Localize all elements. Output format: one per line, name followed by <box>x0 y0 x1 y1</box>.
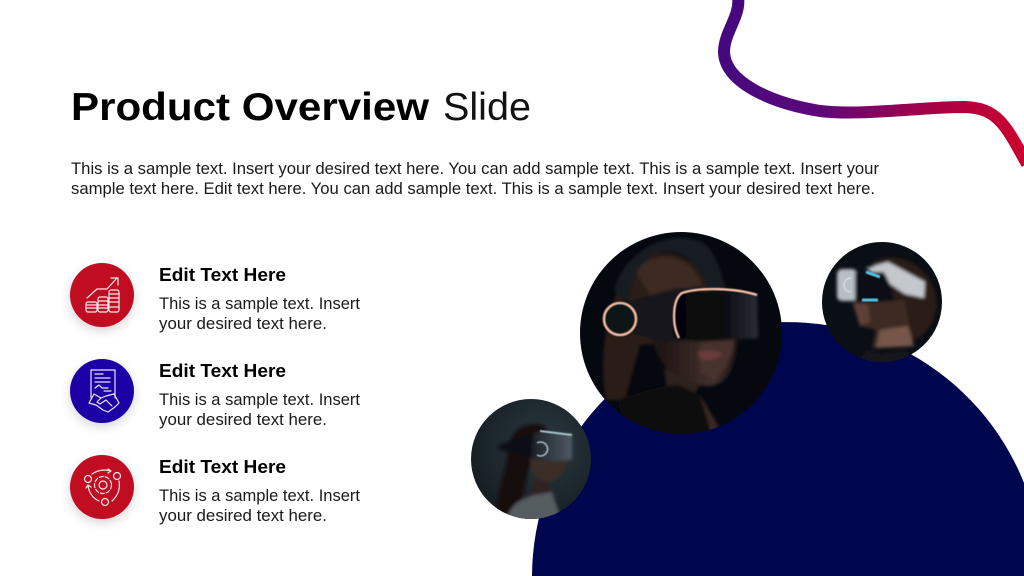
description: This is a sample text. Insert <box>159 295 360 313</box>
list item 2: agreement <box>70 359 360 429</box>
heading: Edit Text Here <box>159 360 286 381</box>
heading: Edit Text Here <box>159 456 286 477</box>
intro paragraph: sample text here. Edit text here. You can add sample text. This is a sample text. Insert your desired text here. <box>71 180 875 198</box>
title: Slide <box>443 86 531 129</box>
intro paragraph <box>71 160 879 198</box>
description <box>159 295 360 333</box>
icon: gear with dollar and cycle arrows <box>70 455 134 519</box>
icon: coins and rising arrow <box>70 263 134 327</box>
description: your desired text here. <box>159 507 327 525</box>
description <box>159 487 360 525</box>
photo: side profile VR headset woman <box>820 240 944 364</box>
description: your desired text here. <box>159 315 327 333</box>
photo: dark background VR headset woman <box>469 397 593 521</box>
description: This is a sample text. Insert <box>159 391 360 409</box>
description: your desired text here. <box>159 411 327 429</box>
heading: Edit Text Here <box>159 264 286 285</box>
decorative gradient wave <box>724 0 1024 164</box>
description: This is a sample text. Insert <box>159 487 360 505</box>
photo: large VR headset woman <box>578 230 784 436</box>
navy background semicircle <box>532 322 1024 576</box>
title: Product Overview <box>71 86 430 129</box>
list item 3: money cycle <box>70 455 360 525</box>
icon: contract and handshake <box>70 359 134 423</box>
list item 1: growth <box>70 263 360 333</box>
intro paragraph: This is a sample text. Insert your desired text here. You can add sample text. This is a sample text. Insert your <box>71 160 879 178</box>
description <box>159 391 360 429</box>
